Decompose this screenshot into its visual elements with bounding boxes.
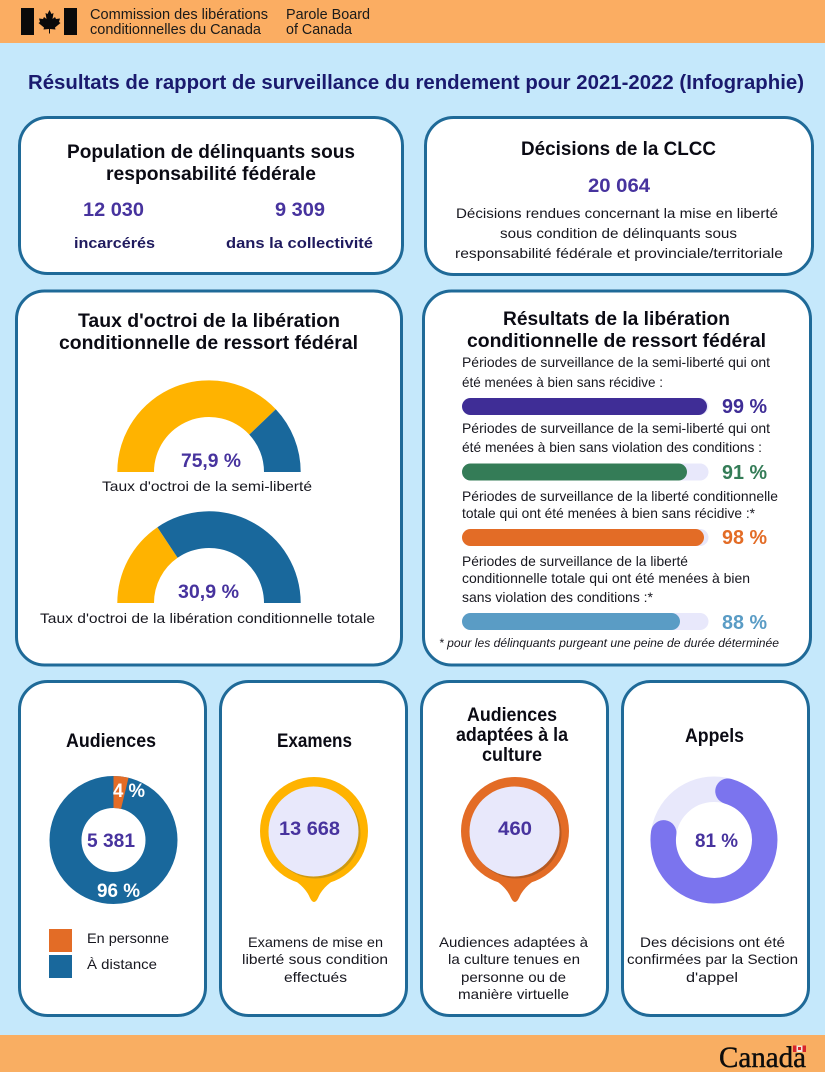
heading: population: responsabilité fédérale <box>106 164 316 185</box>
item: day parole no breach: Périodes de surveillance de la semi-liberté qui ont <box>462 420 770 436</box>
item: full parole no breach: sans violation des conditions :* <box>462 589 654 605</box>
icon: pin with hearing count <box>461 777 569 902</box>
item: full parole no reoffending: Périodes de surveillance de la liberté conditionnelle <box>462 488 778 504</box>
item: full parole no breach <box>462 553 767 634</box>
item: day parole no breach: été menées à bien sans violation des conditions : <box>462 439 762 455</box>
item: full parole no reoffending: 98 % <box>722 527 767 549</box>
heading: outcomes: conditionnelle de ressort fédéral <box>467 331 766 352</box>
text: reviews description: liberté sous condition <box>242 951 388 967</box>
item: day parole no reoffending <box>462 354 770 418</box>
legend: remote <box>49 955 157 978</box>
text: reviews description: Examens de mise en <box>248 934 383 950</box>
text: culturally adapted description <box>439 934 588 1002</box>
item: day parole no reoffending: Périodes de surveillance de la semi-liberté qui ont <box>462 354 770 370</box>
ring chart: appeals <box>663 789 765 891</box>
donut chart: hearings: 96 % <box>97 881 140 902</box>
heading: population <box>67 142 355 185</box>
stat: incarcerated <box>74 200 155 252</box>
stat: incarcerated: incarcérés <box>74 235 155 252</box>
department name in English: of Canada <box>286 22 353 38</box>
stat: community <box>226 200 373 252</box>
department name in French: Commission des libérations <box>90 7 268 23</box>
heading: grant rates <box>59 311 358 354</box>
panel: culturally adapted hearings <box>422 682 608 1016</box>
text: reviews description: effectués <box>284 969 347 985</box>
department name in English <box>286 7 370 38</box>
text: appeals description: confirmées par la Section <box>627 951 798 967</box>
heading: grant rates: Taux d'octroi de la libération <box>78 311 340 332</box>
heading: culturally adapted hearings: culture <box>482 745 542 766</box>
item: day parole no breach: 91 % <box>722 462 767 484</box>
panel: grant rates <box>16 291 402 665</box>
heading: culturally adapted hearings: adaptées à la <box>456 725 568 746</box>
icon: pin with review count <box>260 777 368 902</box>
donut chart: hearings <box>66 776 162 902</box>
panel: population <box>20 118 402 274</box>
panel: reviews <box>220 682 406 1016</box>
department name in French: conditionnelles du Canada <box>90 22 262 38</box>
stat: incarcerated: 12 030 <box>83 200 144 221</box>
text: culturally adapted description: Audiences adaptées à <box>439 934 588 950</box>
text: culturally adapted description: la culture tenues en <box>448 951 580 967</box>
text: culturally adapted description: manière virtuelle <box>458 986 569 1002</box>
item: full parole no reoffending <box>462 488 778 549</box>
legend: in person <box>49 929 169 952</box>
stat: decisions total: 20 064 <box>588 176 650 197</box>
heading: outcomes: Résultats de la libération <box>503 309 730 330</box>
title: Résultats de rapport de surveillance du rendement pour 2021-2022 (Infographie) <box>28 72 804 94</box>
heading: culturally adapted hearings: Audiences <box>467 705 557 726</box>
text: decisions description: responsabilité fédérale et provinciale/territoriale <box>455 245 783 261</box>
donut chart: hearings: 5 381 <box>87 831 135 852</box>
text: appeals description: d'appel <box>686 969 738 985</box>
footnote: * pour les délinquants purgeant une peine de durée déterminée <box>439 636 779 650</box>
heading: hearings: Audiences <box>66 731 156 752</box>
panel: hearings <box>20 682 206 1016</box>
label: day parole: Taux d'octroi de la semi-liberté <box>102 478 312 494</box>
text: appeals description: Des décisions ont été <box>640 934 785 950</box>
item: full parole no reoffending: totale qui ont été menées à bien sans récidive :* <box>462 505 756 521</box>
gauge: full parole <box>117 511 301 603</box>
text: reviews description <box>242 934 388 985</box>
item: day parole no reoffending: été menées à bien sans récidive : <box>462 374 663 390</box>
stat: community: 9 309 <box>275 200 325 221</box>
gauge: full parole: 30,9 % <box>178 582 239 603</box>
legend: in person: En personne <box>87 930 169 946</box>
item: full parole no breach: Périodes de surveillance de la liberté <box>462 553 688 569</box>
donut chart: hearings: 4 % <box>113 781 145 802</box>
stat: community: dans la collectivité <box>226 235 373 252</box>
item: day parole no reoffending: 99 % <box>722 396 767 418</box>
department name in English: Parole Board <box>286 7 370 23</box>
heading: grant rates: conditionnelle de ressort fédéral <box>59 333 358 354</box>
item: day parole no breach <box>462 420 770 484</box>
gauge: day parole <box>117 380 301 472</box>
text: decisions description: Décisions rendues concernant la mise en liberté <box>456 205 778 221</box>
icon: pin with review count: 13 668 <box>279 819 340 840</box>
item: full parole no breach: 88 % <box>722 612 767 634</box>
icon: Canadian flag symbol <box>21 8 77 35</box>
icon: pin with hearing count: 460 <box>498 819 532 840</box>
heading: decisions: Décisions de la CLCC <box>521 139 716 160</box>
item: full parole no breach: conditionnelle totale qui ont été menées à bien <box>462 570 750 586</box>
text: decisions description: sous condition de délinquants sous <box>500 225 737 241</box>
department name in French <box>90 7 268 38</box>
heading: culturally adapted hearings <box>456 705 568 766</box>
legend: remote: À distance <box>87 956 157 972</box>
header band <box>0 0 825 43</box>
text: decisions description <box>455 205 783 261</box>
heading: outcomes <box>467 309 766 352</box>
text: appeals description <box>627 934 798 985</box>
heading: population: Population de délinquants sous <box>67 142 355 163</box>
panel: appeals <box>622 682 808 1016</box>
panel: outcomes <box>424 291 810 665</box>
panel: decisions <box>426 118 812 274</box>
heading: appeals: Appels <box>685 726 744 747</box>
gauge: day parole: 75,9 % <box>181 451 241 472</box>
footer band <box>0 1035 825 1072</box>
ring chart: appeals: 81 % <box>695 831 738 852</box>
heading: reviews: Examens <box>277 731 352 752</box>
label: full parole: Taux d'octroi de la libération conditionnelle totale <box>40 610 375 626</box>
text: culturally adapted description: personne ou de <box>461 969 566 985</box>
